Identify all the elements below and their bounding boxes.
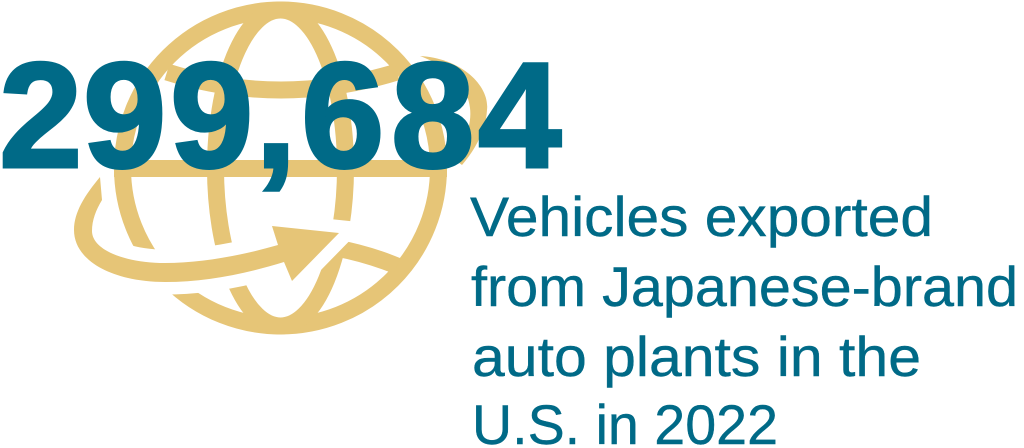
- description text: from Japanese-brand: [471, 255, 1018, 318]
- arrow casing: [84, 226, 339, 281]
- icon: globe with arrow: [74, 10, 487, 326]
- description text: auto plants in the: [472, 325, 921, 388]
- description text: [470, 185, 1018, 448]
- arrow: back tail at upper right: [420, 56, 487, 165]
- globe: [114, 10, 447, 326]
- description text: Vehicles exported: [470, 185, 933, 248]
- arrow: shaft and head: [74, 177, 339, 282]
- headline number: 299,684: [0, 31, 561, 199]
